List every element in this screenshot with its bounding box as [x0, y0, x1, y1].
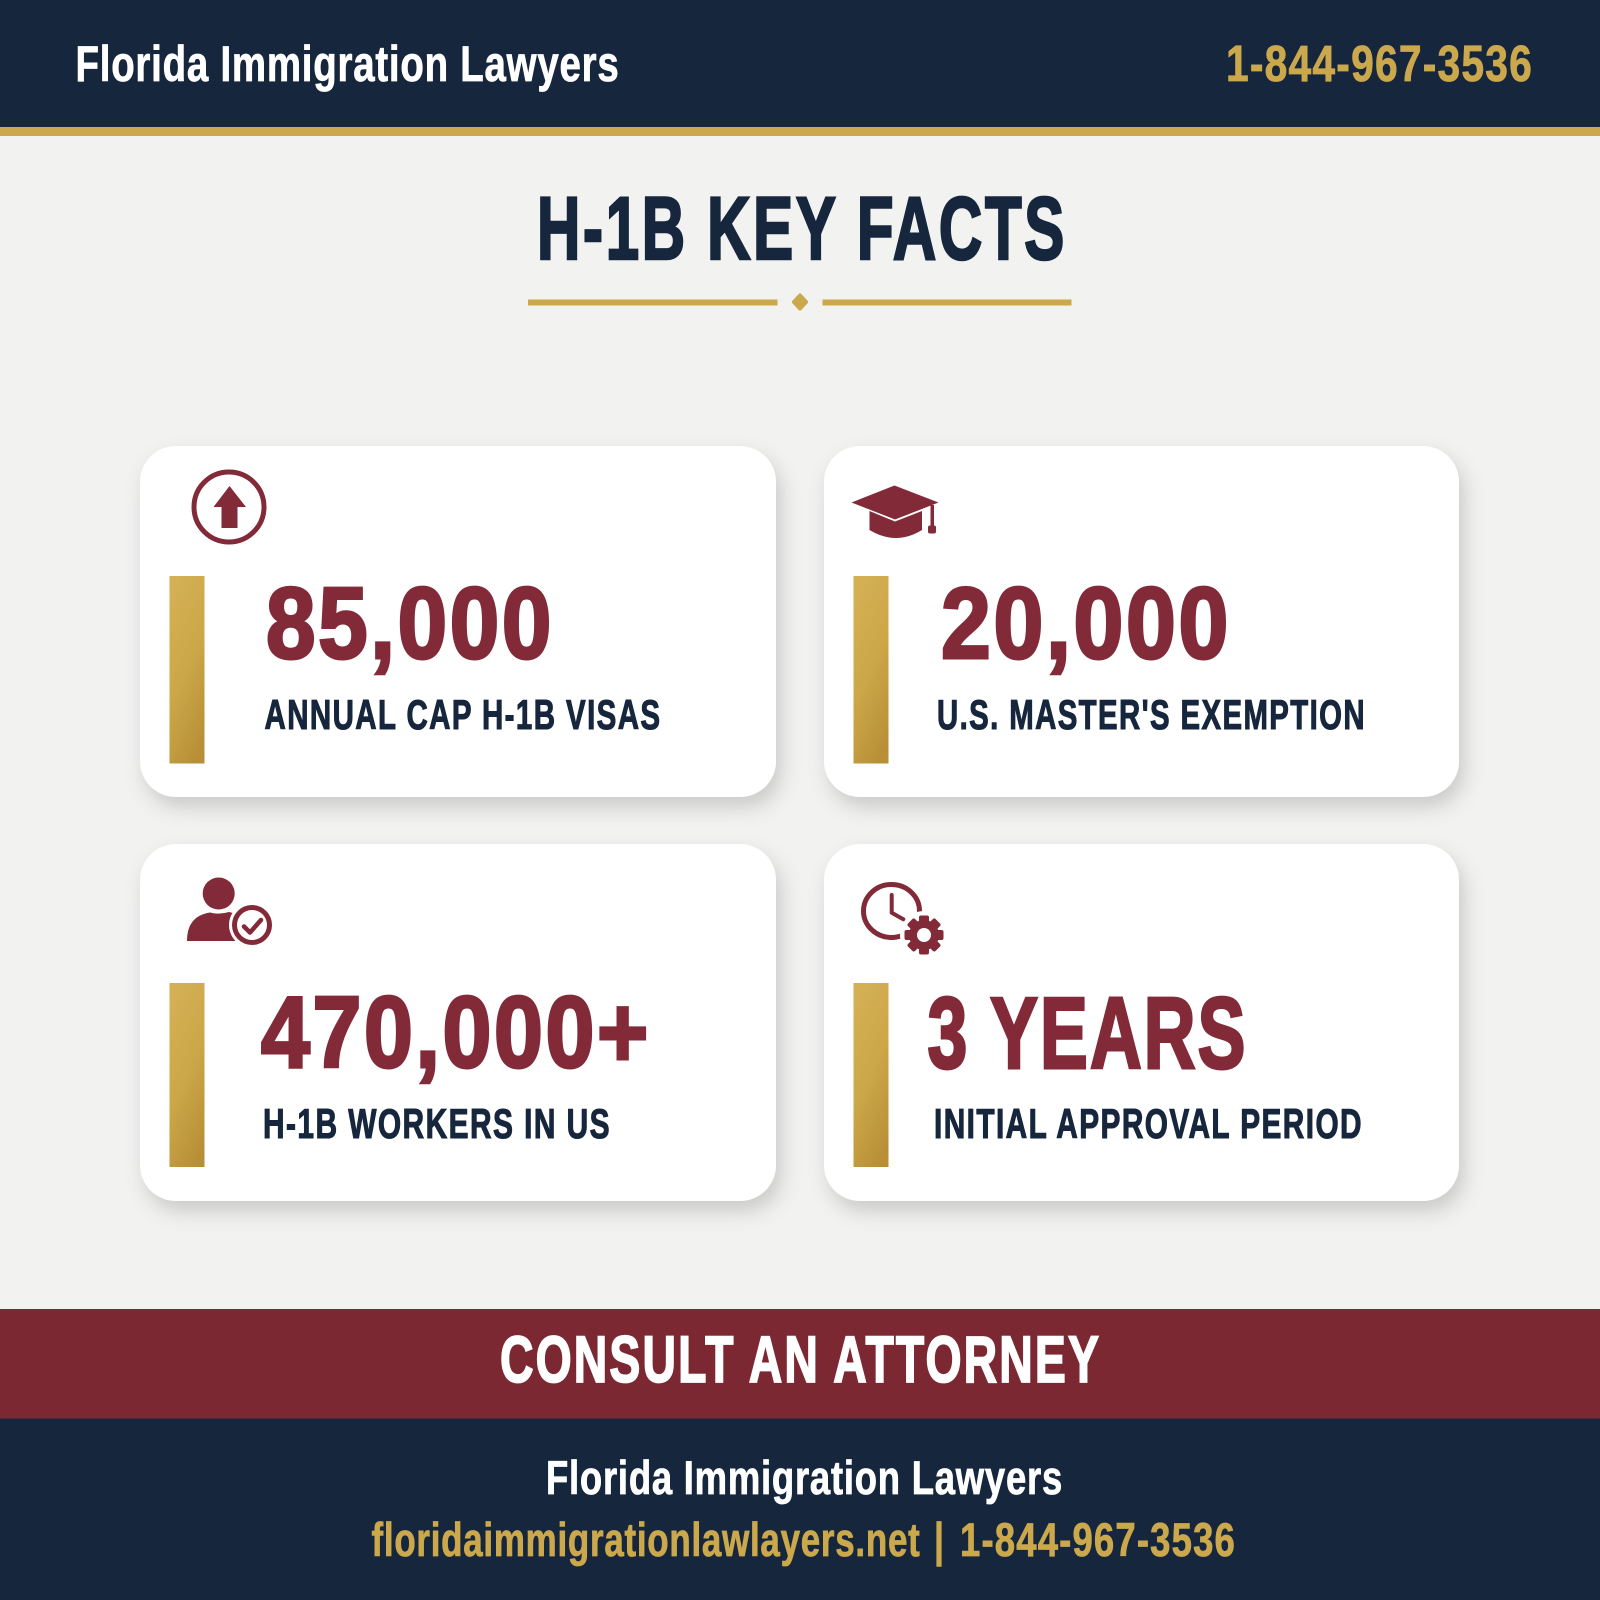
icon: person with check badge [187, 878, 275, 948]
call-to-action band [0, 1309, 1600, 1418]
icon: up arrow in circle [194, 472, 264, 542]
call-to-action text: CONSULT AN ATTORNEY [500, 1322, 1101, 1396]
title divider with diamond [528, 296, 1072, 308]
gold accent bar [170, 576, 204, 764]
panel: master's exemption [824, 446, 1459, 797]
label: workers in US: H-1B WORKERS IN US [263, 1100, 611, 1147]
header bar [0, 0, 1600, 136]
panel: annual cap [140, 446, 776, 797]
footer firm name: Florida Immigration Lawyers [546, 1451, 1063, 1504]
label: approval period: INITIAL APPROVAL PERIOD [934, 1100, 1363, 1147]
gold accent bar [854, 576, 888, 764]
panel: workers in US [140, 844, 776, 1201]
panel: approval period [824, 844, 1459, 1201]
stat: 85,000: 85,000 [266, 568, 554, 680]
footer contact line: floridaimmigrationlawlayers.net [372, 1513, 920, 1566]
stat: 3 years: 3 YEARS [928, 978, 1248, 1090]
header firm name: Florida Immigration Lawyers [76, 36, 620, 92]
icon: clock with gear [864, 884, 948, 959]
footer [0, 1418, 1600, 1600]
footer contact line: 1-844-967-3536 [960, 1513, 1236, 1566]
label: master's exemption: U.S. MASTER'S EXEMPTION [937, 691, 1366, 738]
title: H-1B KEY FACTS [537, 178, 1067, 278]
stat: 20,000: 20,000 [941, 568, 1231, 680]
gold accent bar [170, 983, 204, 1167]
gold accent bar [854, 983, 888, 1167]
footer contact line: | [934, 1513, 944, 1566]
icon: graduation cap [852, 486, 938, 538]
header phone number: 1-844-967-3536 [1226, 35, 1533, 92]
stat: 470,000+: 470,000+ [261, 977, 651, 1089]
label: annual cap: ANNUAL CAP H-1B VISAS [264, 691, 662, 738]
